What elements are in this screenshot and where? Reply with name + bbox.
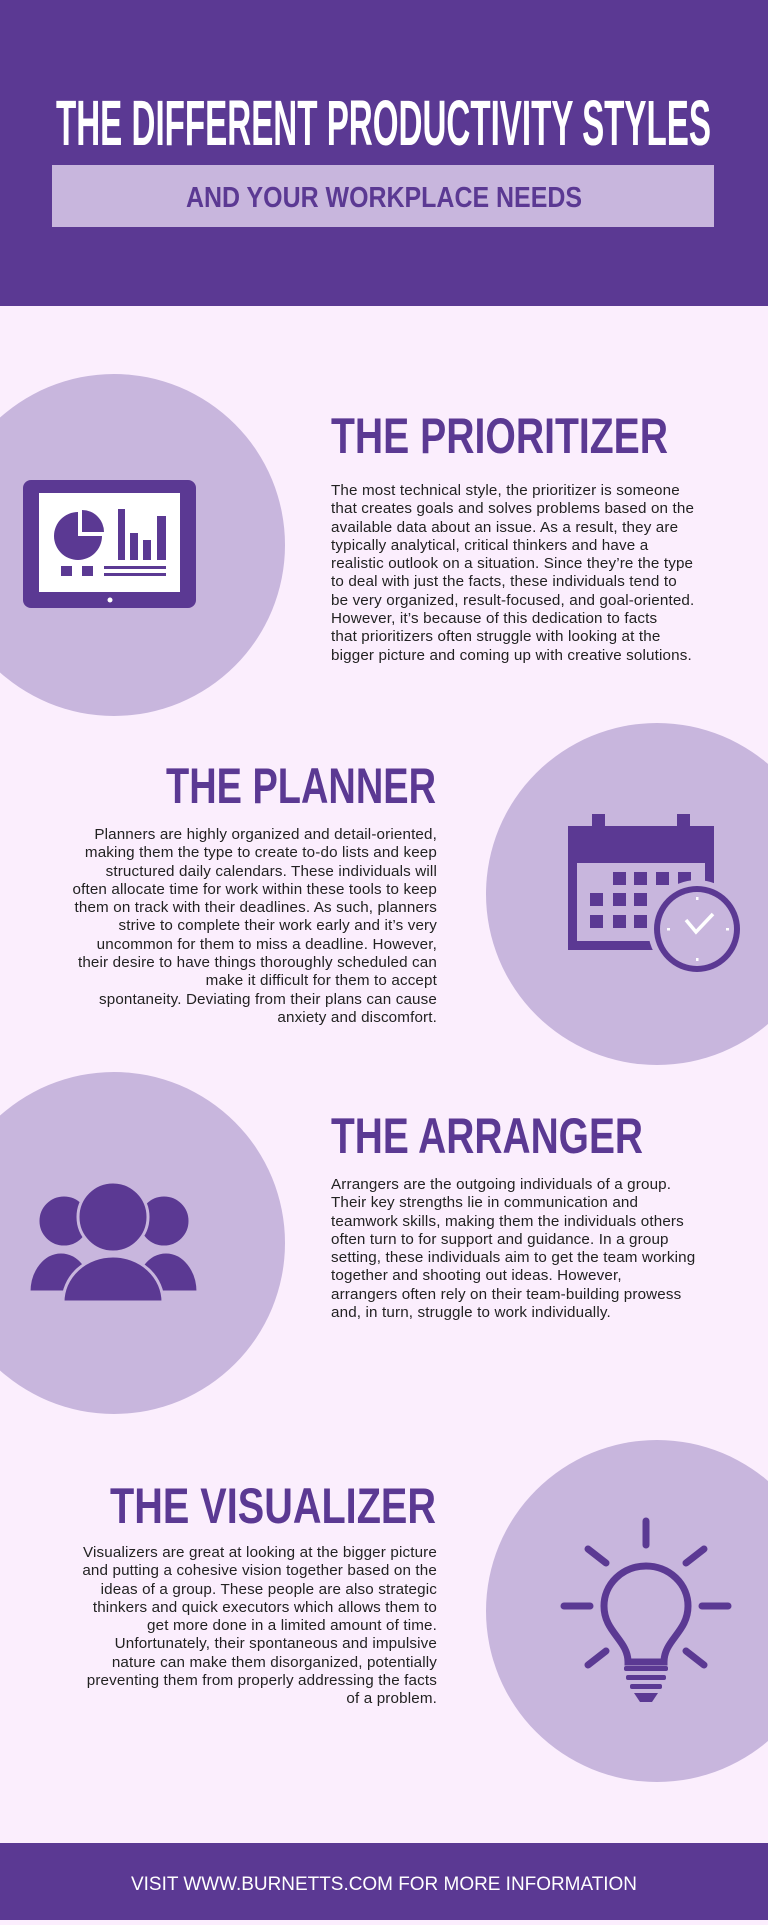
body text: and, in turn, struggle to work individually.: [331, 1304, 611, 1321]
panel: visualizer: [82, 1440, 768, 1782]
footer: VISIT WWW.BURNETTS.COM FOR MORE INFORMATION: [131, 1874, 637, 1895]
icon: group of people: [30, 1184, 196, 1300]
subtitle banner: AND YOUR WORKPLACE NEEDS: [186, 182, 582, 214]
body text: [72, 826, 437, 1026]
body text: [82, 1544, 437, 1707]
body text: [331, 482, 694, 664]
circle background: [486, 1440, 768, 1782]
footer: [0, 1843, 768, 1920]
header band: [0, 0, 768, 306]
body text: realistic outlook on a situation. Since they’re the type: [331, 555, 693, 572]
body text: them on track with their deadlines. As such, planners: [74, 899, 437, 916]
body text: typically analytical, critical thinkers and have a: [331, 537, 648, 554]
icon: monitor with charts: [23, 480, 196, 608]
panel: planner: [72, 723, 768, 1065]
body text: Their key strengths lie in communication and: [331, 1194, 638, 1211]
body text: Arrangers are the outgoing individuals of a group.: [331, 1176, 671, 1193]
circle background: [0, 374, 285, 716]
body text: structured daily calendars. These individuals will: [106, 863, 437, 880]
body text: The most technical style, the prioritizer is someone: [331, 482, 680, 499]
panel: arranger: [0, 1072, 695, 1414]
panel: prioritizer: [0, 374, 694, 716]
body text: teamwork skills, making them the individuals others: [331, 1213, 684, 1230]
body text: available data about an issue. As a result, they are: [331, 519, 678, 536]
icon: calendar with clock: [568, 814, 740, 972]
body text: their desire to have things thoroughly scheduled can: [78, 954, 437, 971]
body text: of a problem.: [346, 1690, 437, 1707]
circle background: [0, 1072, 285, 1414]
body text: Unfortunately, their spontaneous and impulsive: [115, 1635, 437, 1652]
body text: to deal with just the facts, these individuals tend to: [331, 573, 677, 590]
body text: ideas of a group. These people are also strategic: [101, 1581, 437, 1598]
body text: uncommon for them to miss a deadline. However,: [97, 936, 437, 953]
body text: anxiety and discomfort.: [277, 1009, 437, 1026]
body text: However, it’s because of this dedication to facts: [331, 610, 657, 627]
body text: making them the type to create to-do lists and keep: [85, 844, 437, 861]
body text: often turn to for support and guidance. In a group: [331, 1231, 669, 1248]
body text: Planners are highly organized and detail-oriented,: [94, 826, 437, 843]
body text: get more done in a limited amount of time.: [147, 1617, 437, 1634]
body text: thinkers and quick executors which allows them to: [93, 1599, 437, 1616]
body text: often allocate time for work within these tools to keep: [72, 881, 437, 898]
body text: Visualizers are great at looking at the bigger picture: [83, 1544, 437, 1561]
body text: together and shooting out ideas. However,: [331, 1267, 622, 1284]
body text: that prioritizers often struggle with looking at the: [331, 628, 660, 645]
body text: strive to complete their work early and it’s very: [118, 917, 437, 934]
body text: that creates goals and solves problems based on the: [331, 500, 694, 517]
icon: light bulb: [560, 1518, 732, 1702]
body text: bigger picture and coming up with creative solutions.: [331, 647, 692, 664]
body text: nature can make them disorganized, potentially: [112, 1654, 437, 1671]
body text: preventing them from properly addressing the facts: [87, 1672, 437, 1689]
body text: make it difficult for them to accept: [206, 972, 437, 989]
body text: [331, 1176, 695, 1321]
body text: be very organized, result-focused, and goal-oriented.: [331, 592, 694, 609]
body text: spontaneity. Deviating from their plans can cause: [99, 991, 437, 1008]
body text: setting, these individuals aim to get the team working: [331, 1249, 695, 1266]
subtitle banner: [52, 165, 714, 227]
circle background: [486, 723, 768, 1065]
body text: and putting a cohesive vision together based on the: [82, 1562, 437, 1579]
body text: arrangers often rely on their team-building prowess: [331, 1286, 681, 1303]
